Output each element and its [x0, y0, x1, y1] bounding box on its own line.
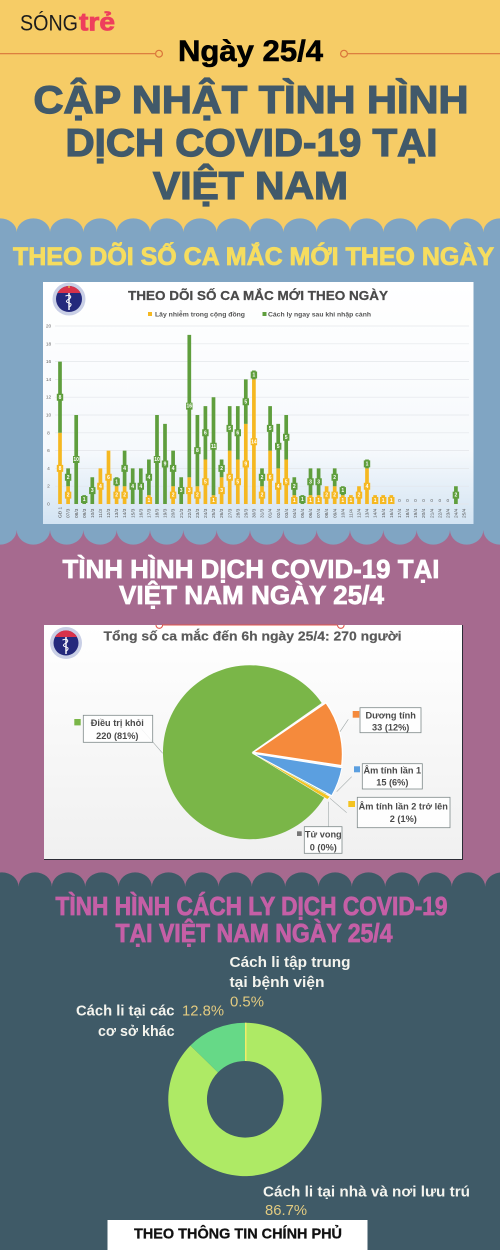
pie slice: negative once	[253, 754, 342, 796]
x axis date labels: 17/4	[397, 508, 403, 518]
x axis date labels: 27/3	[227, 508, 233, 518]
label: hospital quarantine	[230, 955, 350, 1011]
label: home quarantine	[263, 1185, 470, 1219]
x axis date labels: 14/4	[373, 508, 379, 518]
bar values: quarantine: 8	[196, 448, 199, 454]
donut slice: home quarantine	[168, 1023, 322, 1176]
x axis date labels: 30/3	[252, 508, 258, 518]
x axis date labels: 15/4	[381, 508, 387, 518]
label: recovered	[74, 715, 153, 742]
bar values: community: 2	[67, 493, 70, 499]
x axis date labels: 22/4	[437, 508, 443, 518]
zero-value markers: 0	[398, 498, 401, 504]
label: hospital quarantine: tại bệnh viện	[230, 975, 324, 991]
x axis date labels: 21/4	[429, 508, 435, 518]
bar values: community: 1	[148, 498, 151, 504]
x axis date labels: 24/4	[454, 508, 460, 518]
x axis date labels: 13/3	[114, 508, 120, 518]
bar values: quarantine: 3	[317, 479, 320, 485]
bar values: community: 1	[317, 498, 320, 504]
bar values: quarantine: 5	[277, 444, 280, 450]
legend: Cách ly ngay sau khi nhập cảnh	[268, 312, 371, 318]
bar values: community	[59, 439, 393, 504]
x axis date labels: 08/3	[74, 508, 80, 518]
y axis labels: 4	[47, 466, 50, 472]
title: CẬP NHẬT TÌNH HÌNH	[34, 78, 468, 122]
pie slice: recovered	[163, 665, 326, 839]
footer source box	[108, 1220, 368, 1250]
x axis date labels: 14/3	[122, 508, 128, 518]
bar values: quarantine: 3	[309, 479, 312, 485]
title: DỊCH COVID-19 TẠI	[66, 122, 437, 165]
bar values: quarantine: 3	[91, 488, 94, 494]
label: negative twice or more	[348, 797, 450, 828]
bar values: community: 2	[333, 493, 336, 499]
label: negative once: Âm tính lần 1	[363, 764, 421, 775]
heading: new cases by day: THEO DÕI SỐ CA MẮC MỚI THEO NGÀY	[13, 241, 494, 271]
heading: epidemic situation: VIỆT NAM NGÀY 25/4	[119, 580, 385, 610]
label: negative twice or more: 2 (1%)	[390, 814, 417, 824]
panel: plum section background	[0, 520, 500, 890]
bar values: community: 5	[285, 479, 288, 485]
bar values: quarantine: 2	[220, 466, 223, 472]
bar values: quarantine: 5	[269, 426, 272, 432]
x axis date labels: 31/3	[260, 508, 266, 518]
zero-value markers: 0	[438, 498, 441, 504]
x axis date labels: 10/4	[340, 508, 346, 518]
y axis labels: 0	[47, 502, 50, 508]
x axis date labels: 12/3	[106, 508, 112, 518]
x axis date labels: 28/3	[235, 508, 241, 518]
bar values: community: 5	[236, 479, 239, 485]
logo: Sóng Trẻ	[20, 8, 115, 36]
x axis date labels: 18/4	[405, 508, 411, 518]
bar values: quarantine: 1	[83, 497, 86, 503]
zero-value markers	[398, 498, 449, 504]
x axis date labels: 19/4	[413, 508, 419, 518]
bar values: quarantine: 2	[333, 475, 336, 481]
y axis labels: 20	[46, 324, 51, 330]
bar values: quarantine: 1	[341, 488, 344, 494]
bar values: quarantine: 10	[154, 457, 160, 463]
label: positive: 33 (12%)	[372, 723, 409, 733]
label: negative once	[354, 764, 422, 789]
x axis date labels: 12/4	[357, 508, 363, 518]
bar values: quarantine: 2	[455, 493, 458, 499]
label: other facilities: cơ sở khác	[98, 1024, 174, 1040]
stray red rule at panel top	[156, 625, 344, 628]
x axis date labels: GĐ 1	[58, 506, 64, 518]
bar values: quarantine: 4	[148, 475, 151, 481]
label: negative twice or more: Âm tính lần 2 trở lên	[359, 801, 448, 812]
x axis date labels: 13/4	[365, 508, 371, 518]
bar values: quarantine: 1	[253, 373, 256, 379]
bar values: quarantine: 3	[180, 488, 183, 494]
bar value badges: community	[60, 438, 391, 504]
y axis labels: 8	[47, 430, 50, 436]
icon: health ministry logo	[52, 282, 86, 316]
y axis labels	[46, 324, 51, 508]
donut slice: hospital	[245, 1023, 246, 1061]
decorative date rule left	[0, 50, 162, 57]
title	[34, 78, 468, 208]
x axis date labels: 03/4	[284, 508, 290, 518]
bar values: community: 1	[350, 498, 353, 504]
x axis date labels: 07/3	[66, 508, 72, 518]
label: positive	[353, 708, 421, 733]
x axis date labels: 23/3	[195, 508, 201, 518]
heading: quarantine situation: TẠI VIỆT NAM NGÀY 25/4	[116, 918, 393, 948]
label: deaths: Tử vong	[305, 829, 342, 839]
bar values: quarantine: 6	[236, 430, 239, 436]
x axis date labels: 17/3	[146, 508, 152, 518]
panel: daily new cases stacked bar chart	[43, 282, 474, 524]
bar values: community: 3	[220, 488, 223, 494]
heading: epidemic situation	[62, 554, 440, 610]
bar values: quarantine: 11	[211, 444, 216, 450]
x axis date labels: 05/4	[300, 508, 306, 518]
x axis date labels: 20/3	[171, 508, 177, 518]
zero-value markers: 0	[406, 498, 409, 504]
bar values: community: 6	[269, 475, 272, 481]
zero-value markers: 0	[430, 498, 433, 504]
bar values: quarantine: 4	[139, 484, 142, 490]
bar values: community: 8	[59, 466, 62, 472]
bar values: quarantine: 2	[293, 484, 296, 490]
date heading: Ngày 25/4	[178, 35, 323, 68]
bar values: community: 1	[309, 498, 312, 504]
y axis labels: 6	[47, 448, 50, 454]
label: recovered: 220 (81%)	[96, 731, 138, 741]
bar values: quarantine: 9	[164, 462, 167, 468]
x axis date labels: 19/3	[163, 508, 169, 518]
pie slice: positive	[253, 703, 342, 766]
chart title: THEO DÕI SỐ CA MẮC MỚI THEO NGÀY	[128, 288, 388, 303]
label: home quarantine: Cách li tại nhà và nơi lưu trú	[263, 1185, 470, 1201]
logo: Sóng Trẻ: trẻ	[79, 8, 115, 36]
bar values: community: 6	[228, 475, 231, 481]
bar values: community: 1	[390, 498, 393, 504]
bar values: community: 1	[293, 498, 296, 504]
zero-value markers: 0	[422, 498, 425, 504]
x axis date labels: 15/3	[130, 508, 136, 518]
bar values: quarantine: 4	[123, 466, 126, 472]
y axis labels: 2	[47, 484, 50, 490]
bars: community infections	[60, 379, 391, 504]
heading: quarantine situation: TÌNH HÌNH CÁCH LY DỊCH COVID-19	[56, 891, 448, 921]
y axis labels: 14	[46, 377, 51, 383]
bar values: community: 9	[244, 462, 247, 468]
heading: quarantine situation	[56, 891, 448, 948]
logo: Sóng Trẻ: SÓNG	[20, 10, 78, 36]
x axis date labels: 11/3	[98, 509, 104, 518]
label: hospital quarantine: 0.5%	[230, 995, 264, 1011]
x axis date labels: 09/4	[332, 508, 338, 518]
bar values: quarantine: 8	[59, 395, 62, 401]
donut chart: quarantine breakdown	[168, 1023, 322, 1176]
bar values: community: 2	[196, 493, 199, 499]
bar values: quarantine: 6	[204, 430, 207, 436]
bar values: quarantine: 10	[73, 457, 79, 463]
bar values: quarantine: 1	[366, 462, 369, 468]
y axis labels: 12	[46, 395, 51, 401]
x axis date labels: 16/3	[138, 508, 144, 518]
bar values: community: 2	[123, 493, 126, 499]
y axis labels: 16	[46, 359, 51, 365]
y axis labels: 18	[46, 341, 51, 347]
zero-value markers: 0	[414, 498, 417, 504]
bar values: community: 2	[261, 493, 264, 499]
label: negative once: 15 (6%)	[376, 778, 408, 788]
bar values: quarantine: 1	[301, 497, 304, 503]
x axis date labels: 22/3	[187, 508, 193, 518]
bar values: community: 4	[277, 484, 280, 490]
label: other facilities: 12.8%	[182, 1004, 224, 1020]
bar values: community: 4	[366, 484, 369, 490]
bar values: community: 2	[115, 493, 118, 499]
panel: blue section background	[0, 218, 500, 545]
x axis date labels: 26/3	[219, 508, 225, 518]
bar values: quarantine: 4	[172, 466, 175, 472]
legend	[148, 310, 371, 318]
zero-value markers: 0	[446, 498, 449, 504]
bar values: community: 14	[251, 439, 257, 445]
x axis date labels: 10/3	[90, 508, 96, 518]
bars: imported cases in quarantine	[60, 335, 456, 504]
x axis date labels: 04/4	[292, 508, 298, 518]
grid lines	[55, 326, 469, 504]
x axis date labels: 06/4	[308, 508, 314, 518]
footer source box: THEO THÔNG TIN CHÍNH PHỦ	[134, 1224, 342, 1242]
x axis date labels: 20/4	[421, 508, 427, 518]
decorative date rule right	[341, 50, 500, 57]
x axis date labels: 02/4	[276, 508, 282, 518]
bar values: quarantine: 5	[244, 399, 247, 405]
label: other facilities	[76, 1004, 224, 1040]
bar values: community: 2	[358, 493, 361, 499]
bar values: community: 4	[99, 484, 102, 490]
bar values: quarantine: 16	[187, 404, 192, 410]
x axis date labels: 09/3	[82, 508, 88, 518]
panel: yellow header background	[0, 0, 500, 240]
x axis date labels: 08/4	[324, 508, 330, 518]
panel: total cases pie chart	[44, 625, 462, 860]
bar values: community: 6	[107, 475, 110, 481]
panel: dark section background	[0, 872, 500, 1250]
bar values: quarantine	[59, 373, 458, 503]
bar values: quarantine: 2	[67, 475, 70, 481]
title: VIỆT NAM	[153, 164, 348, 208]
pie slice: negative twice	[252, 753, 330, 799]
label: deaths: 0 (0%)	[310, 843, 337, 853]
x axis date labels: 21/3	[179, 508, 185, 518]
heading: epidemic situation: TÌNH HÌNH DỊCH COVID-19 TẠI	[62, 554, 440, 584]
bar values: community: 1	[374, 498, 377, 504]
bar values: community: 1	[382, 498, 385, 504]
chart title: Tổng số ca mắc đến 6h ngày 25/4: 270 người	[104, 629, 402, 644]
bar values: community: 1	[212, 498, 215, 504]
donut slice: other facilities	[190, 1023, 245, 1072]
legend: Lây nhiễm trong cộng đồng	[155, 310, 245, 318]
bar values: community: 5	[204, 479, 207, 485]
x axis date labels	[58, 506, 468, 518]
bar values: quarantine: 5	[228, 426, 231, 432]
bar values: community: 2	[172, 493, 175, 499]
bar values: quarantine: 4	[131, 484, 134, 490]
bar value badges: quarantine	[60, 372, 456, 503]
bar values: community: 1	[341, 498, 344, 504]
bar values: community: 2	[325, 493, 328, 499]
label: hospital quarantine: Cách li tập trung	[230, 955, 350, 971]
x axis date labels: 11/4	[348, 509, 354, 518]
bar values: quarantine: 1	[115, 479, 118, 485]
x axis date labels: 25/3	[211, 508, 217, 518]
x axis date labels: 07/4	[316, 508, 322, 518]
label: positive: Dương tính	[365, 710, 416, 720]
icon: health ministry logo	[50, 627, 82, 659]
x axis date labels: 16/4	[389, 508, 395, 518]
label: deaths	[297, 827, 342, 853]
label: recovered: Điều trị khỏi	[91, 718, 144, 728]
x axis date labels: 24/3	[203, 508, 209, 518]
x axis date labels: 25/4	[462, 508, 468, 518]
leader lines	[140, 719, 352, 827]
x axis date labels: 01/4	[268, 508, 274, 518]
bar values: quarantine: 2	[261, 475, 264, 481]
x axis date labels: 23/4	[445, 508, 451, 518]
bar values: community: 3	[188, 488, 191, 494]
label: home quarantine: 86.7%	[265, 1203, 307, 1219]
label: other facilities: Cách li tại các	[76, 1004, 174, 1020]
y axis labels: 10	[46, 412, 51, 418]
x axis date labels: 18/3	[155, 508, 161, 518]
bar values: quarantine: 5	[285, 435, 288, 441]
x axis date labels: 29/3	[243, 508, 249, 518]
